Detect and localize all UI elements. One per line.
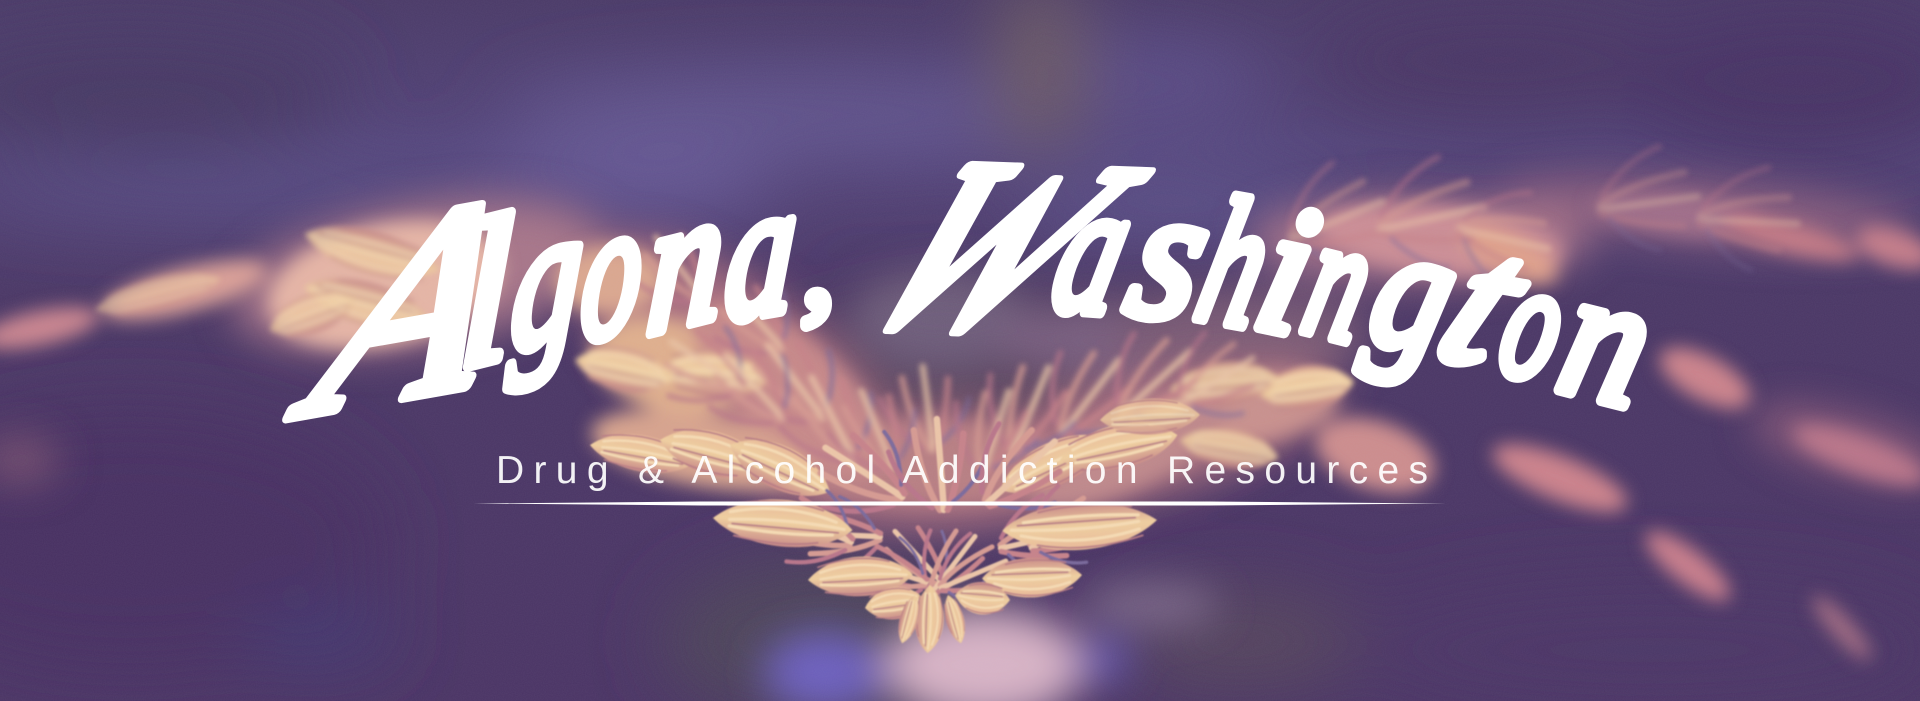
title: Algona, Washington: g (1354, 188, 1476, 392)
far blurred branches (0, 164, 1920, 550)
title: Algona, Washington: a (720, 138, 803, 363)
sharp central tufts (587, 396, 1201, 653)
title: Algona, Washington: l (457, 171, 516, 413)
title: Algona, Washington: A (266, 131, 553, 479)
title: Algona, Washington: s (1111, 149, 1230, 360)
right side blurred needles (790, 186, 1920, 667)
title: Algona, Washington: n (1543, 231, 1673, 447)
title: Algona, Washington: i (1239, 166, 1336, 375)
title: Algona, Washington: n (642, 144, 731, 376)
underline rule (473, 502, 1447, 506)
title: Algona, Washington: o (576, 155, 649, 386)
title: Algona, Washington: W (809, 111, 1188, 382)
title: Algona, Washington (266, 111, 1673, 479)
title: Algona, Washington: h (1181, 160, 1290, 366)
title: Algona, Washington: o (1484, 228, 1584, 416)
subtitle: Drug & Alcohol Addiction Resources (496, 449, 1428, 492)
bottom glow (763, 583, 1220, 701)
title: Algona, Washington: n (1288, 178, 1392, 380)
title: Algona, Washington: t (1411, 199, 1562, 403)
mid focus tufts (91, 143, 1802, 486)
left side blurred needles (0, 202, 914, 509)
title: Algona, Washington: a (1036, 144, 1151, 355)
title: Algona, Washington: g (506, 160, 589, 395)
title: Algona, Washington: , (802, 191, 834, 335)
